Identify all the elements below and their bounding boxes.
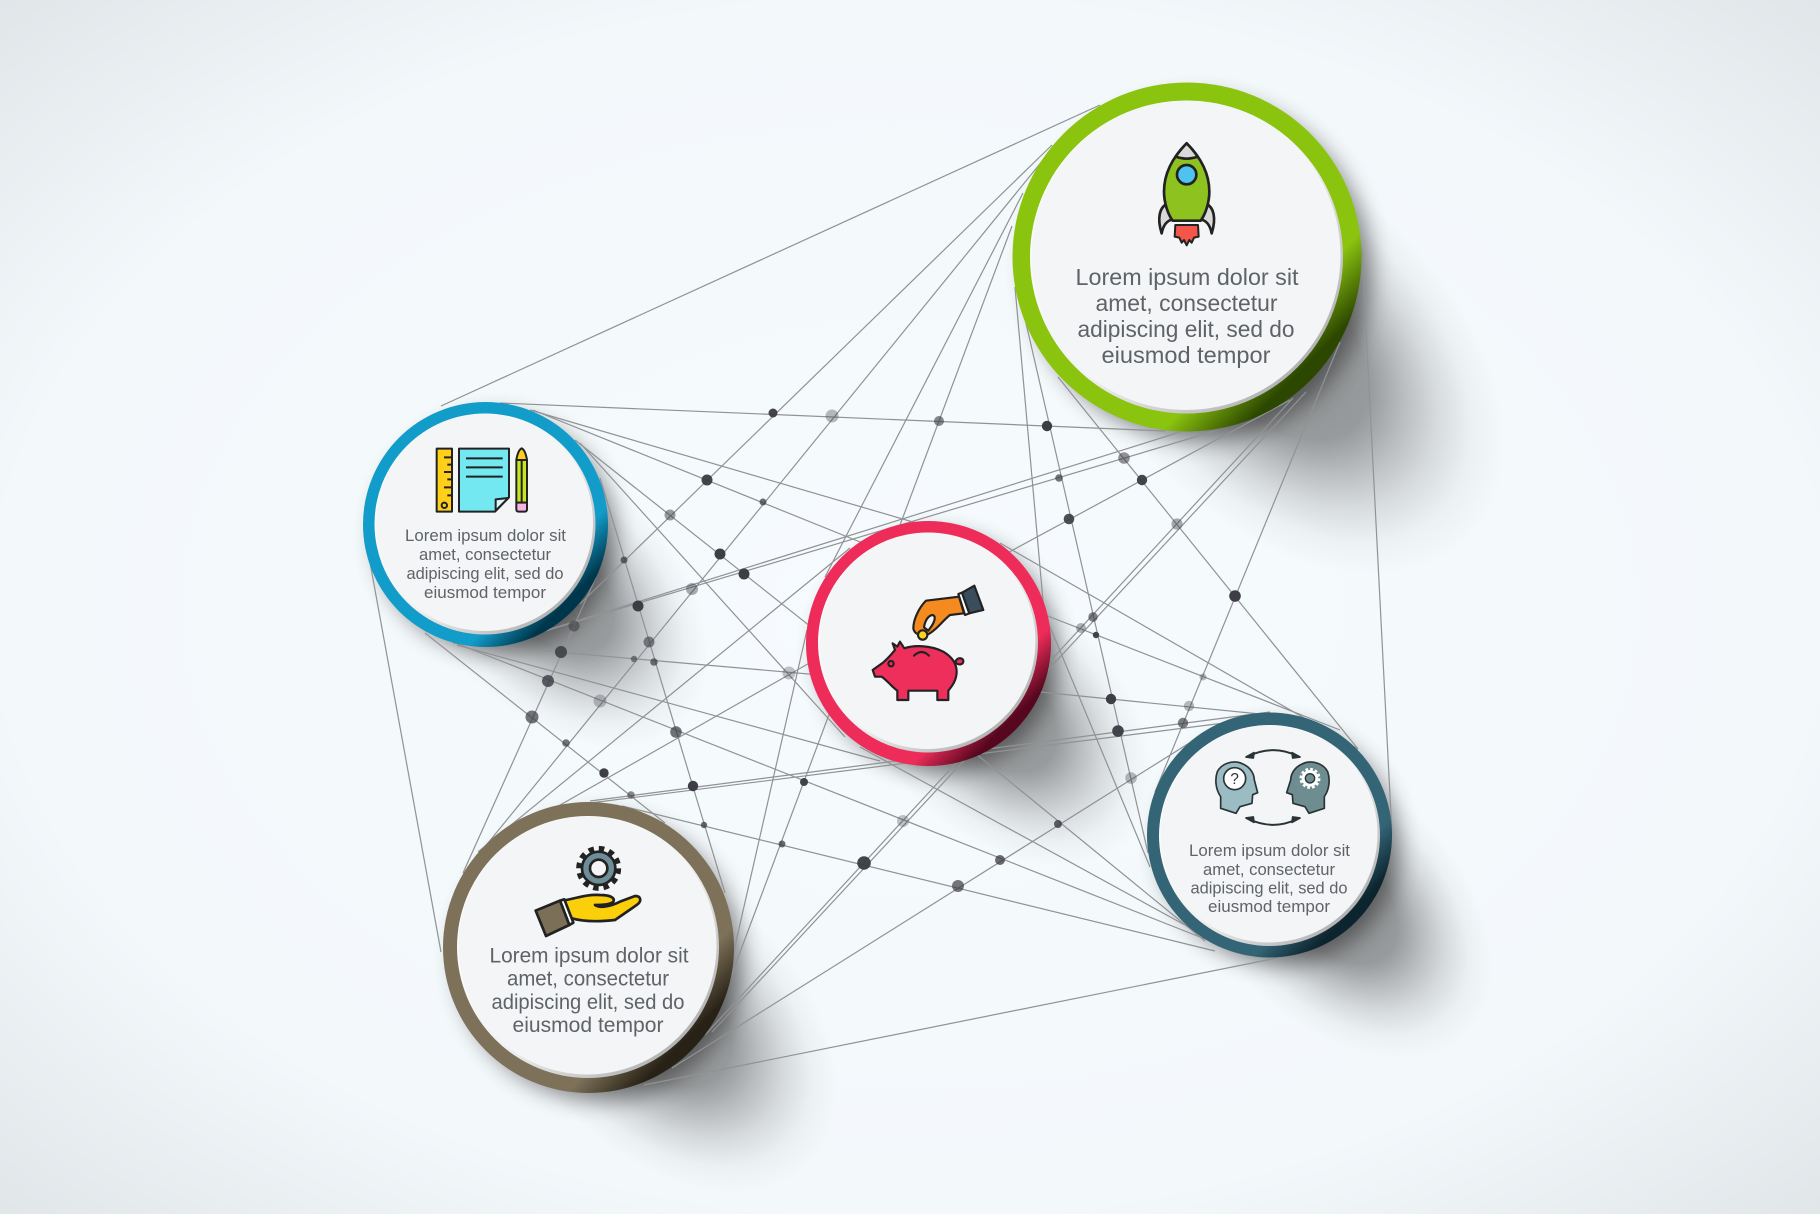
- icon: hand dropping coin in piggy bank: [873, 586, 983, 700]
- text block: teal circle: Lorem ipsum dolor sit: [1189, 841, 1350, 860]
- text block: blue circle: [405, 526, 566, 602]
- panel: red circle with piggy bank: [806, 521, 1051, 766]
- text block: blue circle: amet, consectetur: [419, 545, 551, 564]
- icon: hand holding gear: [536, 849, 640, 936]
- panel: teal circle with two heads: [1147, 712, 1392, 958]
- text block: brown circle: adipiscing elit, sed do: [492, 991, 684, 1014]
- network nodes: [526, 408, 1241, 892]
- text block: teal circle: adipiscing elit, sed do: [1190, 878, 1348, 898]
- text block: brown circle: eiusmod tempor: [512, 1014, 664, 1037]
- panel: green circle with rocket: [1012, 82, 1362, 432]
- text block: blue circle: adipiscing elit, sed do: [406, 564, 564, 583]
- panel: brown circle with hand and gear: [443, 802, 734, 1093]
- text block: green circle: eiusmod tempor: [1102, 342, 1271, 368]
- text block: blue circle: Lorem ipsum dolor sit: [405, 526, 566, 545]
- text block: brown circle: amet, consectetur: [507, 968, 669, 990]
- panel: blue circle with stationery: [363, 402, 608, 647]
- circle drop shadows: [331, 37, 1591, 1214]
- text block: blue circle: eiusmod tempor: [424, 583, 546, 602]
- text block: green circle: [1076, 264, 1299, 368]
- text block: green circle: adipiscing elit, sed do: [1078, 316, 1294, 342]
- network connection lines: [369, 105, 1392, 1085]
- icon: rocket: [1159, 143, 1214, 245]
- icon: ruler, note and pencil: [437, 448, 527, 512]
- tight contact shadows beside the rings: [375, 97, 1399, 1101]
- icon: two heads exchanging ideas: [1216, 750, 1329, 825]
- icon: two heads exchanging ideas: ?: [1230, 771, 1239, 788]
- text block: green circle: Lorem ipsum dolor sit: [1076, 264, 1299, 290]
- text block: teal circle: eiusmod tempor: [1208, 897, 1330, 916]
- text block: teal circle: [1189, 841, 1350, 916]
- text block: green circle: amet, consectetur: [1096, 290, 1278, 316]
- text block: brown circle: Lorem ipsum dolor sit: [490, 944, 689, 968]
- text block: teal circle: amet, consectetur: [1203, 860, 1335, 879]
- text block: brown circle: [490, 944, 689, 1037]
